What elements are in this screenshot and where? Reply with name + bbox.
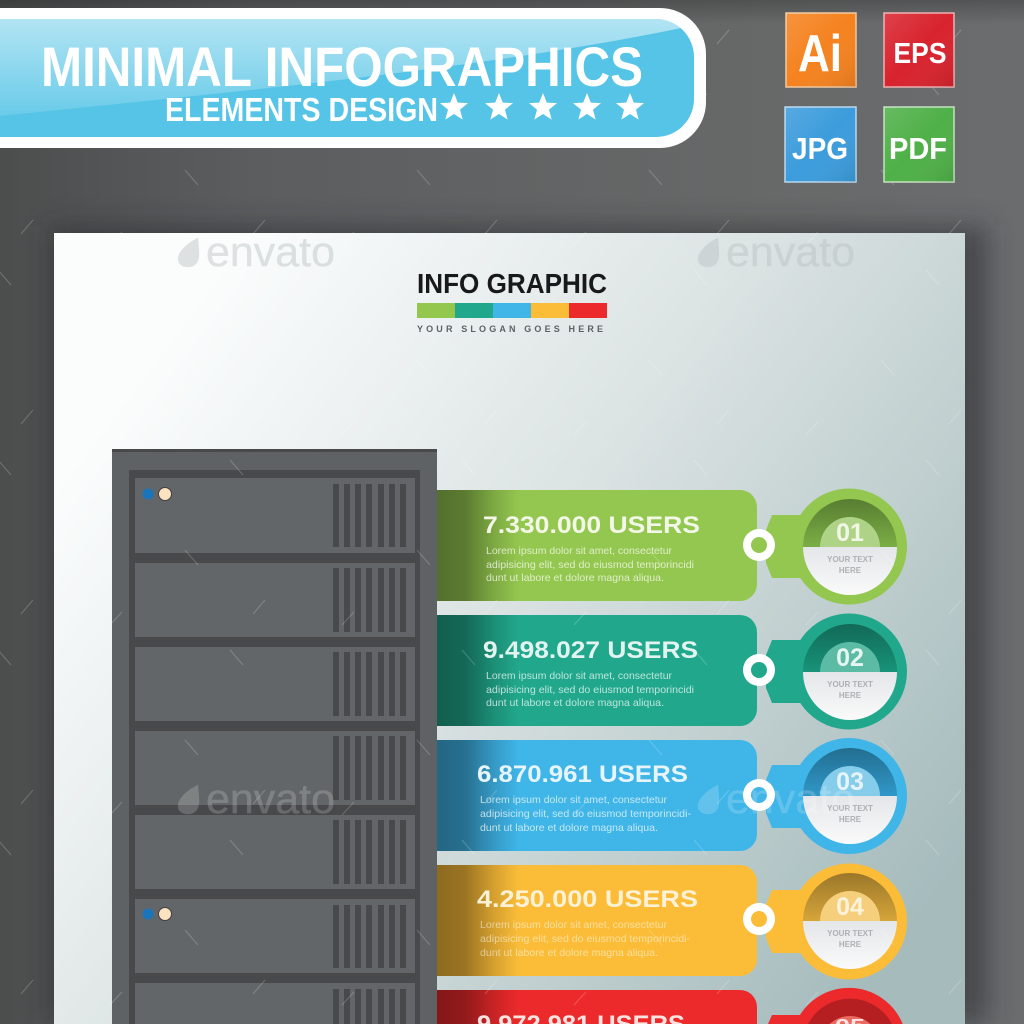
users figure: 6.870.961 USERS: [477, 761, 688, 788]
banner fill: [0, 19, 694, 137]
users figure: 4.250.000 USERS: [477, 886, 698, 913]
panel shadow: [50, 226, 988, 1024]
band: [437, 740, 757, 851]
description: dunt ut labore et dolore magna aliqua.: [480, 822, 658, 834]
watermarks upper: envato: [726, 228, 855, 275]
description: Lorem ipsum dolor sit amet, consectetur: [486, 545, 672, 557]
panel: infographic sheet: [54, 233, 965, 1024]
watermarks upper: [178, 228, 855, 275]
icon: PDF format badge: [884, 107, 954, 182]
band: [437, 865, 757, 976]
description: adipisicing elit, sed do eiusmod temporincidi: [486, 684, 694, 696]
label: YOUR TEXT: [827, 555, 873, 564]
icon: JPG format badge: [785, 107, 856, 182]
description: dunt ut labore et dolore magna aliqua.: [486, 697, 664, 709]
description: Lorem ipsum dolor sit amet, consectetur: [480, 794, 667, 806]
description: [480, 794, 692, 834]
icon: EPS format badge: [884, 13, 954, 87]
number: 01: [836, 519, 864, 547]
icon: Ai format badge: Ai: [798, 25, 842, 83]
ring: [743, 654, 775, 686]
number: 02: [836, 644, 864, 672]
server unit 3: [135, 647, 415, 721]
description: [486, 670, 694, 709]
description: adipisicing elit, sed do eiusmod temporincidi-: [480, 808, 692, 820]
icon: JPG format badge: JPG: [792, 131, 848, 166]
description: dunt ut labore et dolore magna aliqua.: [480, 947, 658, 959]
band: [437, 490, 757, 601]
users figure: 9.498.027 USERS: [483, 637, 698, 664]
label: HERE: [839, 815, 862, 824]
server unit 4: [135, 731, 415, 805]
icon: EPS format badge: EPS: [894, 38, 946, 70]
label: HERE: [839, 940, 862, 949]
icon: PDF format badge: PDF: [889, 131, 947, 166]
connector tab and medallion: [768, 988, 903, 1024]
number: 04: [836, 893, 864, 921]
banner subtitle: ELEMENTS DESIGN: [165, 91, 438, 128]
description: adipisicing elit, sed do eiusmod temporincidi-: [480, 933, 691, 945]
connector tab and medallion: [766, 738, 907, 854]
banner gloss: [0, 19, 681, 116]
server unit 7: [135, 983, 415, 1024]
server unit 1: [135, 478, 415, 553]
ring: [743, 529, 775, 561]
label: HERE: [839, 691, 862, 700]
label: YOUR TEXT: [827, 804, 873, 813]
label: YOUR TEXT: [827, 929, 873, 938]
slogan: YOUR SLOGAN GOES HERE: [417, 324, 603, 334]
users figure: 7.330.000 USERS: [483, 512, 700, 539]
ring: [743, 779, 775, 811]
description: dunt ut labore et dolore magna aliqua.: [486, 572, 664, 584]
connector tab and medallion: [766, 864, 907, 980]
ring: [743, 903, 775, 935]
banner title: MINIMAL INFOGRAPHICS: [41, 35, 643, 98]
description: Lorem ipsum dolor sit amet, consectetur: [480, 919, 667, 931]
description: Lorem ipsum dolor sit amet, consectetur: [486, 670, 672, 682]
status lights: [142, 488, 172, 500]
icon: Ai format badge: [786, 13, 856, 87]
watermarks lower: [178, 775, 855, 822]
row 1: green: [437, 488, 907, 604]
server unit 2: [135, 563, 415, 637]
rating stars: [440, 93, 644, 120]
connector tab and medallion: [766, 488, 907, 604]
description: [486, 545, 694, 584]
row 2: teal: [437, 614, 907, 730]
row 5: red: [437, 988, 903, 1024]
label: HERE: [839, 566, 862, 575]
status lights: [142, 908, 172, 920]
banner frame: [0, 8, 706, 148]
banner: [0, 8, 706, 148]
server rack: [112, 449, 437, 1024]
number: 03: [836, 768, 864, 796]
row 3: blue: [437, 738, 907, 854]
top shadow strip: [0, 0, 1024, 24]
connector tab and medallion: [766, 614, 907, 730]
logo: info graphic heading: [417, 268, 607, 334]
heading: INFO GRAPHIC: [417, 268, 607, 299]
label: YOUR TEXT: [827, 680, 873, 689]
watermarks upper: envato: [206, 228, 335, 275]
description: adipisicing elit, sed do eiusmod temporincidi: [486, 559, 694, 571]
server unit 5: [135, 815, 415, 889]
band: [437, 990, 757, 1024]
watermarks lower: envato: [206, 775, 335, 822]
description: [480, 919, 691, 959]
band: [437, 615, 757, 726]
row 4: yellow: [437, 864, 907, 980]
watermarks lower: envato: [726, 775, 855, 822]
server unit 6: [135, 899, 415, 973]
colour bar: [417, 303, 607, 318]
